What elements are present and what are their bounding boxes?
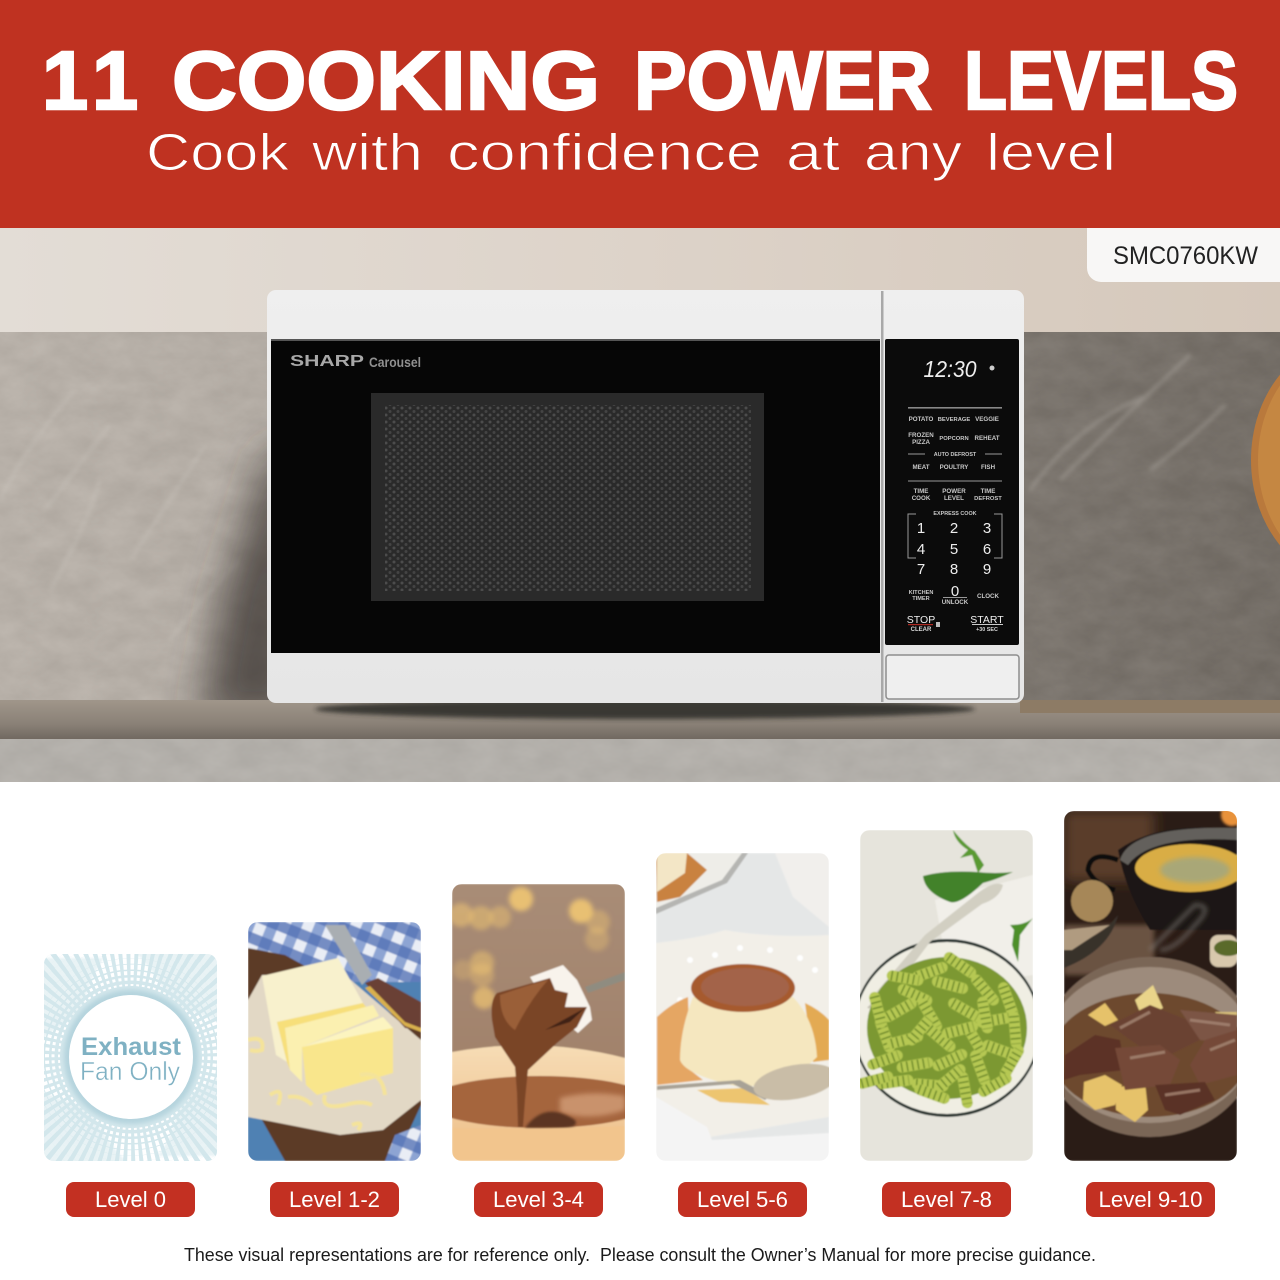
- clock display: 12:30: [924, 356, 977, 382]
- control panel: 8: [950, 561, 958, 578]
- steam: [1150, 905, 1205, 950]
- shadow cast by the microwave: [200, 450, 300, 720]
- control panel: 2: [950, 520, 958, 537]
- bokeh lights: [449, 887, 610, 1009]
- label: level 3-4: [474, 1182, 603, 1217]
- plate: [853, 939, 1041, 1117]
- label: level 3-4: Level 3-4: [493, 1187, 584, 1212]
- control panel: AUTO DEFROST: [934, 452, 977, 458]
- spoon: [585, 972, 625, 993]
- subtitle: at: [786, 124, 841, 182]
- title: POWER: [634, 34, 932, 127]
- control panel: 7: [917, 561, 925, 578]
- butter curls: [248, 1039, 385, 1130]
- label: level 5-6: [678, 1182, 807, 1217]
- label: level 9-10: [1086, 1182, 1215, 1217]
- control panel: LEVEL: [944, 495, 964, 502]
- control panel: 9: [983, 561, 991, 578]
- card: level 9-10 beef stew: [1064, 811, 1237, 1161]
- label: level 0: Level 0: [95, 1187, 166, 1212]
- control panel: REHEAT: [975, 435, 1000, 442]
- fusilli pasta: [861, 957, 1027, 1104]
- control panel: MEAT: [912, 464, 930, 471]
- control panel: FISH: [981, 464, 996, 471]
- title: 11: [42, 34, 138, 127]
- card: level 1-2 butter: [248, 922, 421, 1161]
- control panel: FROZEN: [908, 432, 934, 439]
- control panel: UNLOCK: [942, 599, 969, 606]
- basil leaves: [923, 830, 1033, 962]
- fan label circle: Fan Only: [80, 1056, 180, 1086]
- card: level 3-4 chocolate marshmallow: [452, 884, 625, 1161]
- subtitle: Cook: [146, 124, 290, 182]
- control panel: DEFROST: [974, 496, 1002, 502]
- control panel: BEVERAGE: [938, 417, 970, 423]
- brand logo: Carousel: [369, 355, 421, 370]
- model number tag: [1087, 228, 1280, 282]
- door window: [371, 393, 764, 601]
- control panel: KITCHEN: [909, 590, 933, 596]
- control panel: CLEAR: [911, 627, 932, 633]
- title: COOKING: [172, 34, 600, 127]
- label: level 5-6: Level 5-6: [697, 1187, 788, 1212]
- marshmallow: [530, 965, 592, 1033]
- butter blocks: [262, 958, 393, 1095]
- label: level 1-2: Level 1-2: [289, 1187, 380, 1212]
- control panel: POULTRY: [940, 464, 969, 471]
- lower white panel: [0, 782, 1280, 1280]
- fan label circle: Exhaust: [81, 1033, 182, 1061]
- disclaimer footnote: These visual representations are for reference only. Please consult the Owner’s Manual for more precise guidance.: [184, 1244, 1096, 1265]
- control panel: 0: [951, 583, 959, 600]
- wooden board: [1251, 375, 1280, 546]
- potatoes: [1083, 985, 1237, 1122]
- control panel: POTATO: [909, 416, 934, 423]
- door release handle: [886, 655, 1019, 699]
- brand logo: SHARP: [290, 353, 364, 370]
- level labels: [66, 1182, 1215, 1217]
- pot with soup: [1088, 828, 1245, 930]
- napkin: [656, 1097, 829, 1161]
- lace plate: [656, 930, 829, 1137]
- microwave oven: [267, 290, 1024, 719]
- plate: [1064, 956, 1237, 1138]
- table edge: [1064, 1138, 1237, 1161]
- bowl: [452, 1045, 625, 1161]
- control panel: [885, 339, 1019, 645]
- control panel: START: [970, 614, 1004, 626]
- subtitle: confidence: [447, 124, 762, 182]
- knife: [325, 925, 421, 1032]
- control panel: PIZZA: [912, 439, 930, 446]
- control panel: +30 SEC: [976, 627, 998, 633]
- control panel: 3: [983, 520, 991, 537]
- card: level 0 exhaust fan: [44, 954, 217, 1161]
- napkin: [935, 875, 1033, 985]
- back plate: [656, 853, 829, 927]
- kitchen background scene: [0, 228, 1280, 782]
- door glass: [271, 339, 880, 653]
- subtitle: with: [311, 124, 423, 182]
- caramel pool: [657, 997, 703, 1085]
- spoon: [656, 1063, 829, 1101]
- title: [42, 34, 1238, 127]
- control panel: TIMER: [912, 596, 930, 602]
- label: level 7-8: [882, 1182, 1011, 1217]
- model number tag: SMC0760KW: [1113, 242, 1258, 270]
- card: level 7-8 pesto fusilli: [853, 830, 1041, 1161]
- flan body: [680, 997, 817, 1087]
- label: level 1-2: [270, 1182, 399, 1217]
- control panel: VEGGIE: [975, 416, 999, 423]
- control panel: TIME: [914, 488, 928, 495]
- control panel: 4: [917, 541, 925, 558]
- subtitle: any: [864, 124, 962, 182]
- bread rolls and bowl: [1064, 880, 1242, 968]
- fan label circle: [69, 995, 193, 1119]
- control panel: STOP: [907, 614, 935, 626]
- subtitle: level: [986, 124, 1116, 182]
- control panel: POPCORN: [939, 436, 969, 442]
- control panel: POWER: [942, 488, 966, 495]
- card: level 5-6 flan: [656, 853, 839, 1161]
- label: level 7-8: Level 7-8: [901, 1187, 992, 1212]
- control panel: COOK: [912, 495, 931, 502]
- control panel: 5: [950, 541, 958, 558]
- control panel: 1: [917, 520, 925, 537]
- label: level 9-10: Level 9-10: [1098, 1187, 1202, 1212]
- control panel: EXPRESS COOK: [933, 511, 977, 517]
- chocolate coating and drip: [492, 978, 587, 1127]
- header band: [0, 0, 1280, 228]
- swirl wedges: [44, 954, 217, 1161]
- brand logo: [290, 353, 421, 370]
- control panel: TIME: [981, 488, 995, 495]
- control panel: CLOCK: [977, 593, 1000, 600]
- title: LEVELS: [964, 34, 1238, 127]
- subtitle: [146, 124, 1116, 182]
- beef chunks: [1064, 1005, 1237, 1115]
- fork: [876, 883, 1003, 993]
- label: level 0: [66, 1182, 195, 1217]
- control panel: 6: [983, 541, 991, 558]
